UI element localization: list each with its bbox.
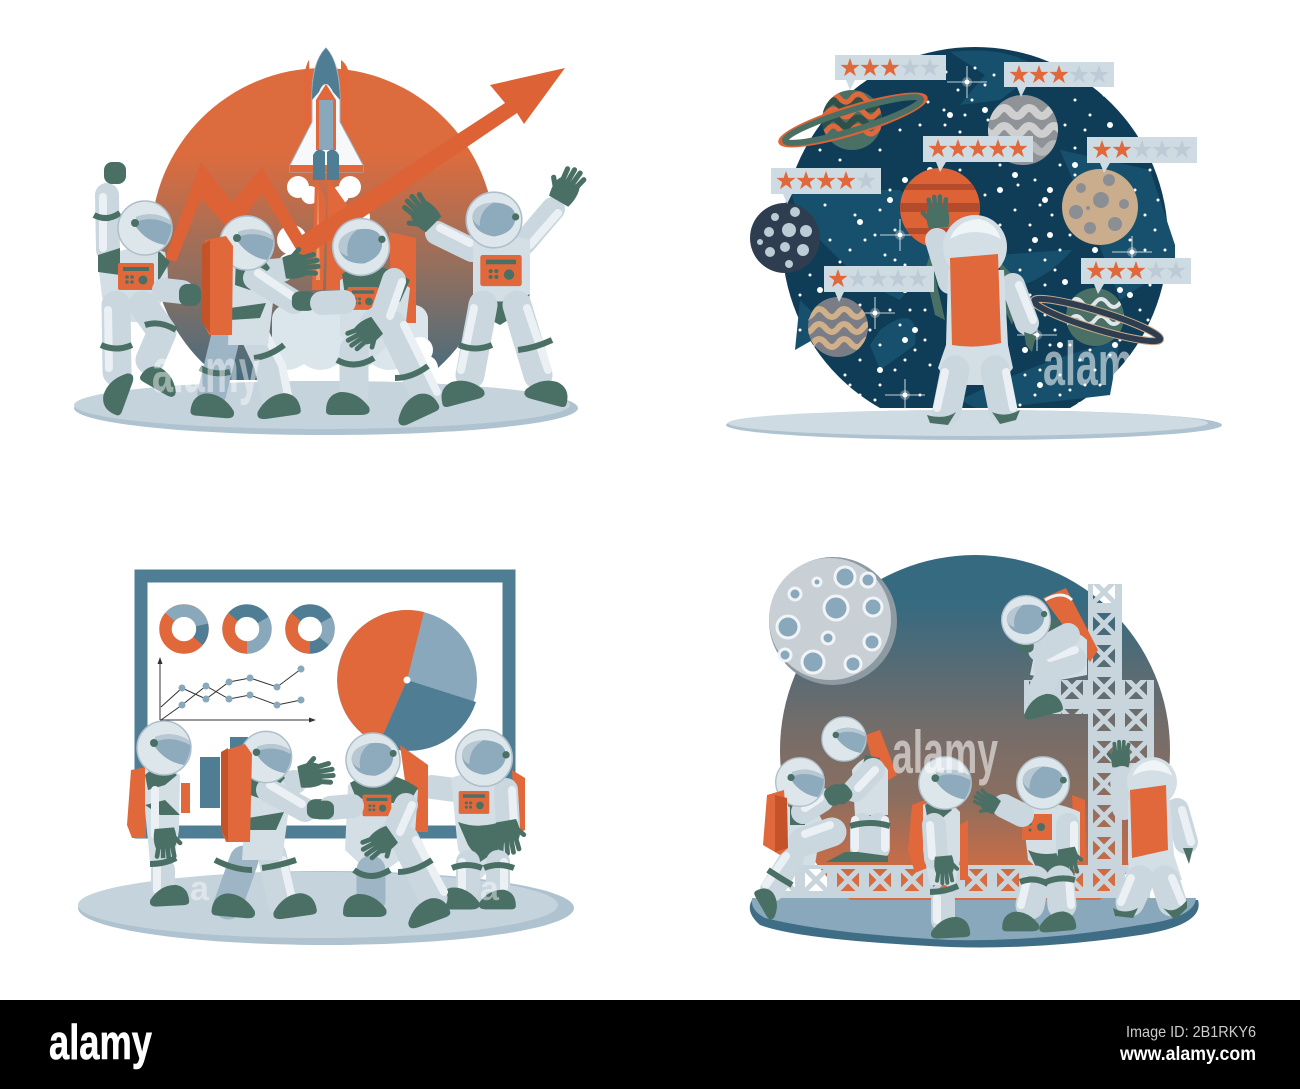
astronaut: bowing handshake <box>322 213 441 428</box>
logo: alamy <box>49 1016 152 1070</box>
faded watermark: alamy <box>892 719 998 786</box>
pie chart <box>337 610 477 751</box>
ground ellipse <box>726 410 1222 440</box>
astronaut: backpack handshake <box>190 216 320 420</box>
sparkles <box>855 66 1152 411</box>
astronaut: left standing <box>127 721 191 907</box>
website: www.alamy.com <box>1119 1044 1256 1065</box>
image id: Image ID: 2B1RKY6 <box>1126 1024 1256 1041</box>
scaffold tower <box>1024 584 1154 898</box>
ground ellipse <box>74 381 578 435</box>
planet: grey waves <box>988 95 1058 165</box>
planet: tan craters <box>1062 169 1138 245</box>
moon <box>769 557 897 685</box>
nebula shapes <box>790 50 1180 410</box>
rating: four stars <box>771 168 881 204</box>
donut 1 <box>166 610 202 648</box>
ground ellipse <box>750 900 1199 948</box>
astronaut: sitting on tower <box>998 588 1098 721</box>
planet: tan waves <box>808 297 868 357</box>
planet: dark spotted <box>750 203 820 273</box>
footer bar <box>0 1000 1300 1089</box>
planet: ringed orange <box>778 90 928 150</box>
space shuttle <box>290 48 363 180</box>
faded watermark: alam <box>1043 330 1133 399</box>
planet: ringed green <box>1031 288 1163 348</box>
astronaut: backpack centre left <box>211 731 335 920</box>
display board <box>141 576 509 832</box>
rating: three stars <box>835 55 946 90</box>
rating: three stars <box>1081 258 1191 294</box>
starfield circle <box>782 47 1180 433</box>
gradient circle <box>780 555 1170 900</box>
panel: planet ratings <box>726 47 1222 440</box>
rating: three stars <box>1004 62 1114 97</box>
faded letters: a <box>480 870 500 908</box>
rocket flames <box>312 178 347 290</box>
bar chart <box>200 737 248 808</box>
donut 2 <box>228 610 266 648</box>
donut charts <box>166 610 328 648</box>
panel: rocket launch growth team <box>74 48 587 435</box>
astronaut: right arm on friend <box>432 730 526 909</box>
rating: five stars <box>923 136 1033 172</box>
scaffold walkway <box>778 865 1150 898</box>
panel: building tower <box>750 555 1199 948</box>
faded letters: a <box>190 870 210 908</box>
stars <box>800 68 1165 410</box>
planet: red striped <box>900 168 980 246</box>
smoke cloud <box>270 176 438 381</box>
astronaut: waving <box>397 163 587 408</box>
faded letters <box>190 870 500 908</box>
rating boxes <box>771 55 1197 302</box>
astronaut: kneeling left <box>753 758 849 921</box>
panel: presentation board <box>78 576 574 945</box>
ground ellipse <box>78 871 574 945</box>
astronaut: back view with raised hand <box>922 196 1036 425</box>
gradient sun circle <box>155 68 488 380</box>
line chart <box>158 657 316 722</box>
astronaut: centre right waving <box>970 757 1086 933</box>
astronaut: bowing centre right <box>312 729 451 930</box>
astronaut: centre looking down <box>908 757 971 939</box>
astronaut: standing helping <box>822 717 897 862</box>
donut 3 <box>292 610 328 648</box>
astronaut: back view tower <box>1109 742 1193 920</box>
faded watermark: alamy <box>152 337 260 406</box>
astronaut: fist raised <box>94 162 201 416</box>
rating: two stars <box>1087 137 1197 173</box>
growth arrow <box>165 68 565 262</box>
rating: one star <box>824 266 934 302</box>
